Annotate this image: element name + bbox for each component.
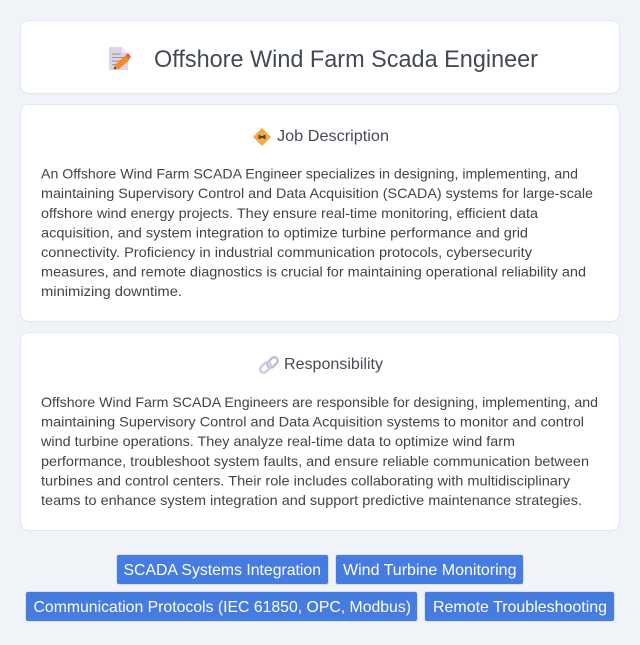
icon: chain link <box>259 356 279 374</box>
tag: Communication Protocols <box>26 592 418 622</box>
text block: responsibility: Offshore Wind Farm SCADA Engineers are responsible for designing, implementing, and <box>41 394 598 410</box>
icon: construction diamond <box>254 129 270 145</box>
tag: Remote Troubleshooting <box>424 592 614 622</box>
panel: responsibility <box>20 332 620 530</box>
text block: responsibility: wind turbine operations. They analyze real-time data to optimize wind farm <box>40 433 515 449</box>
text block: job description: maintaining Supervisory Control and Data Acquisition (SCADA) systems for large-scale <box>41 185 593 201</box>
tag: Communication Protocols: Communication Protocols (IEC 61850, OPC, Modbus) <box>34 599 411 616</box>
text block: responsibility: performance, troubleshoot system faults, and ensure reliable communication between <box>41 453 589 469</box>
text block: job description: connectivity. Proficiency in industrial communication protocols, cybersecurity <box>41 244 532 260</box>
title: Offshore Wind Farm Scada Engineer <box>154 46 538 73</box>
text block: job description: acquisition, and system integration to optimize turbine performance and grid <box>41 224 528 240</box>
heading: job description: Job Description <box>277 128 389 145</box>
text block: responsibility: teams to enhance system integration and support predictive maintenance strategies. <box>41 492 582 508</box>
tag: Wind Turbine Monitoring: Wind Turbine Monitoring <box>343 562 516 579</box>
text block: responsibility: turbines and control centers. Their role includes collaborating with multidisciplinary <box>41 472 570 488</box>
icon: document with pencil <box>109 47 131 70</box>
text block: job description: minimizing downtime. <box>41 283 182 299</box>
text block: job description: offshore wind energy projects. They ensure real-time monitoring, efficient data <box>41 205 538 221</box>
text block: job description: An Offshore Wind Farm SCADA Engineer specializes in designing, implementing, and <box>41 166 578 182</box>
panel: job description <box>20 104 620 322</box>
text block: responsibility: maintaining Supervisory Control and Data Acquisition systems to monitor and control <box>41 414 584 430</box>
text block: job description: measures, and remote diagnostics is crucial for maintaining operational reliability and <box>41 264 586 280</box>
panel: title header <box>20 20 620 94</box>
text block: responsibility <box>40 394 598 508</box>
tag: Wind Turbine Monitoring <box>336 554 524 584</box>
tag: SCADA Systems Integration: SCADA Systems Integration <box>124 562 321 579</box>
skill tags <box>26 554 614 622</box>
tag: Remote Troubleshooting: Remote Troubleshooting <box>433 599 607 616</box>
tag: SCADA Systems Integration <box>116 554 328 584</box>
text block: job description <box>41 166 593 299</box>
heading: responsibility: Responsibility <box>284 356 383 373</box>
